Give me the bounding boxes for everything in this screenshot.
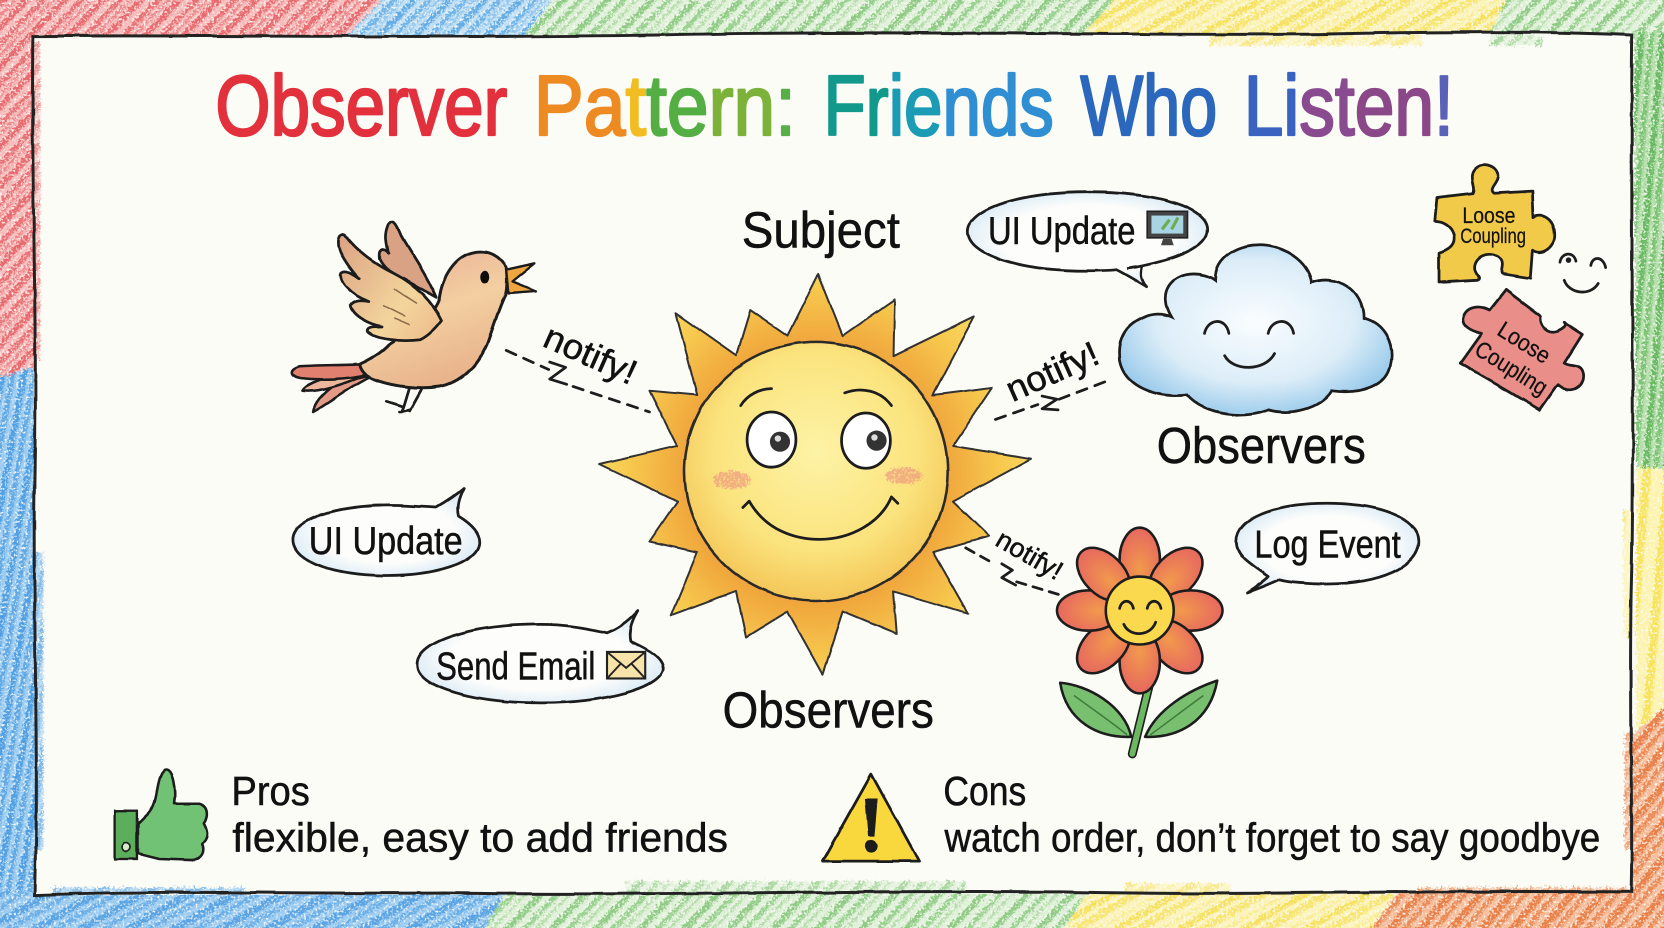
cons block — [822, 768, 1600, 861]
bird back wing — [380, 222, 436, 297]
bird beak — [506, 263, 536, 293]
bubble label: Log Event — [1254, 522, 1401, 566]
leaf veins — [1074, 695, 1203, 735]
squiggle — [550, 362, 567, 384]
speech bubble: UI Update top — [968, 192, 1208, 287]
pros block — [115, 768, 728, 861]
crayon: right yellow strip — [1636, 467, 1664, 741]
left eye — [747, 412, 796, 467]
speech bubble: Send Email — [417, 611, 663, 703]
bubble shape — [293, 488, 480, 575]
sun rays — [600, 274, 1032, 674]
observer: cloud — [1119, 245, 1392, 415]
right leaf — [1145, 681, 1217, 737]
smile — [743, 497, 898, 539]
label: Loose: Loose — [1462, 203, 1515, 228]
bubble label: Send Email — [436, 645, 595, 689]
notify arrow: bird to sun — [506, 317, 649, 412]
label: Loose: Loose — [1493, 316, 1555, 369]
eyebrows — [741, 389, 891, 406]
pros text: flexible, easy to add friends — [232, 815, 728, 861]
flower face — [1106, 577, 1174, 645]
dashed line — [966, 548, 1059, 595]
bird body — [360, 252, 507, 388]
red puzzle shape — [1460, 290, 1584, 410]
cloud body — [1119, 245, 1392, 415]
wing feather marks — [384, 289, 416, 325]
heading: Subject: Subject — [742, 201, 900, 258]
pros heading: Pros — [231, 768, 310, 814]
crayon: bottom green strip — [475, 890, 1093, 928]
bird eye — [481, 271, 489, 283]
bubble shape — [968, 192, 1208, 287]
left leaf — [1060, 683, 1131, 737]
bird tail — [292, 364, 377, 412]
crayon: top blue strip — [329, 0, 568, 40]
title: Pattern: — [534, 58, 796, 153]
yellow puzzle shape — [1435, 165, 1555, 282]
title — [215, 58, 1454, 153]
bird legs — [386, 385, 421, 412]
cons heading: Cons — [943, 768, 1026, 814]
icon: envelope — [607, 652, 645, 678]
sun face — [684, 342, 948, 601]
bubble shape — [417, 611, 663, 703]
label: Coupling: Coupling — [1460, 225, 1526, 248]
small smiling face — [1560, 254, 1606, 292]
squiggle — [1002, 564, 1016, 585]
icon: warning triangle — [822, 774, 919, 861]
notify arrow: sun to flower — [966, 524, 1068, 595]
bubble shape — [1236, 503, 1419, 592]
speech bubble: Log Event — [1236, 503, 1419, 592]
puzzle: red piece — [1460, 290, 1584, 410]
cheeks — [713, 467, 922, 488]
crayon: top right green strip — [1488, 0, 1664, 38]
flower stem — [1132, 685, 1149, 754]
sun subject — [600, 274, 1032, 674]
puzzle: yellow piece — [1435, 165, 1555, 282]
crayon: bottom yellow strip — [1056, 890, 1401, 928]
dashed line — [995, 379, 1112, 419]
crayon: bottom right orange corner — [1360, 695, 1664, 928]
icon: thumbs up — [115, 770, 207, 860]
icon: monitor — [1147, 211, 1188, 245]
notify label: notify! — [991, 524, 1068, 586]
observer: bird — [292, 222, 536, 412]
dashed line — [506, 350, 649, 412]
title: Listen! — [1244, 58, 1454, 153]
crayon: left blue strip — [0, 366, 38, 928]
cons text: watch order, don’t forget to say goodbye — [944, 815, 1600, 861]
crayon: bottom blue strip — [0, 892, 509, 928]
label: Coupling: Coupling — [1470, 336, 1553, 400]
bubble label: UI Update — [988, 209, 1136, 253]
crayon: top green strip — [520, 0, 1133, 40]
observer: flower — [1057, 528, 1223, 754]
notify arrow: sun to cloud — [995, 334, 1112, 419]
notify label: notify! — [538, 317, 643, 393]
bubble label: UI Update — [309, 519, 463, 563]
crayon: top yellow strip — [1082, 0, 1520, 36]
crayon: top left red corner — [0, 0, 395, 380]
speech bubble: UI Update left — [293, 488, 480, 575]
heading: Observers bottom: Observers — [723, 681, 934, 738]
title: Who — [1080, 58, 1217, 153]
flower petals — [1057, 528, 1223, 693]
notify label: notify! — [1000, 334, 1105, 410]
squiggle — [1042, 396, 1058, 410]
crayon: right green strip — [1634, 32, 1664, 478]
cloud face — [1204, 321, 1294, 367]
bird front wing — [338, 234, 441, 341]
right eye — [842, 413, 890, 468]
title: Friends — [824, 58, 1054, 153]
title: Observer — [215, 58, 507, 153]
heading: Observers right: Observers — [1157, 417, 1366, 474]
